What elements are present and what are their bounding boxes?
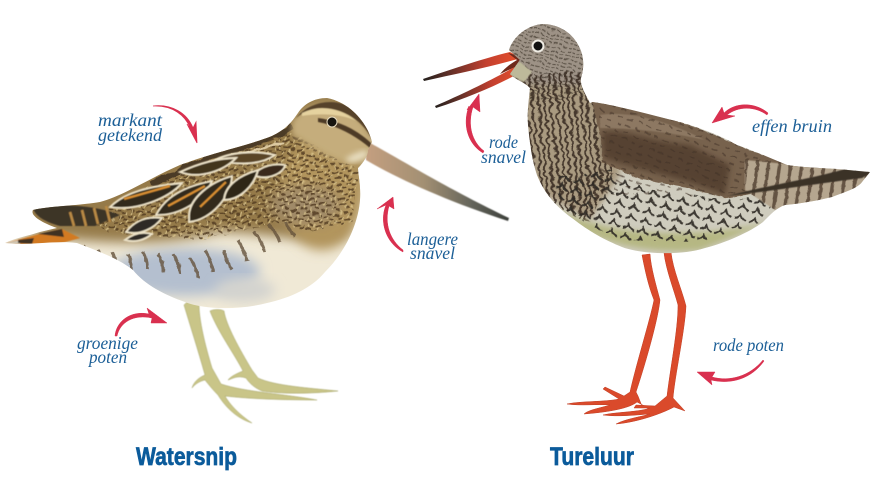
- snipe flank bars: [84, 222, 295, 278]
- label: langere snavel: snavel: [410, 243, 455, 263]
- snipe legs and toes: [184, 301, 338, 423]
- bird: Tureluur: [423, 15, 880, 424]
- snipe wing: [110, 152, 285, 241]
- arrow: markant getekend: [153, 106, 197, 143]
- arrow: effen bruin: [712, 105, 768, 123]
- arrow: rode snavel: [466, 94, 484, 153]
- label: rode poten: rode poten: [713, 335, 784, 355]
- redshank legs and toes: [567, 252, 686, 424]
- label: langere snavel: langere: [407, 229, 458, 249]
- snipe eye: [327, 117, 337, 127]
- arrow: langere snavel: [377, 197, 403, 252]
- arrow: rode poten: [697, 360, 764, 385]
- heading: Watersnip: Watersnip: [136, 443, 237, 471]
- heading: Tureluur: Tureluur: [550, 443, 634, 471]
- snipe bill: [366, 141, 509, 221]
- snipe tail: [5, 205, 120, 245]
- snipe head: [292, 104, 372, 163]
- redshank eye: [532, 40, 544, 52]
- redshank wing: [592, 102, 831, 198]
- snipe back stripes: [150, 126, 292, 183]
- label: rode snavel: snavel: [481, 147, 526, 167]
- arrow: groenige poten: [115, 308, 167, 336]
- label: groenige poten: groenige: [77, 333, 138, 353]
- label: rode snavel: rode: [489, 132, 518, 152]
- snipe body: [5, 98, 372, 308]
- redshank tail: [745, 160, 870, 210]
- redshank belly scales: [560, 208, 762, 253]
- bird: Watersnip: [0, 90, 509, 423]
- label: effen bruin: effen bruin: [752, 116, 832, 136]
- label: markant getekend: getekend: [98, 125, 162, 145]
- redshank body: [509, 24, 870, 254]
- redshank bill: [423, 52, 523, 108]
- label: groenige poten: poten: [87, 347, 127, 367]
- label: markant getekend: markant: [98, 110, 163, 130]
